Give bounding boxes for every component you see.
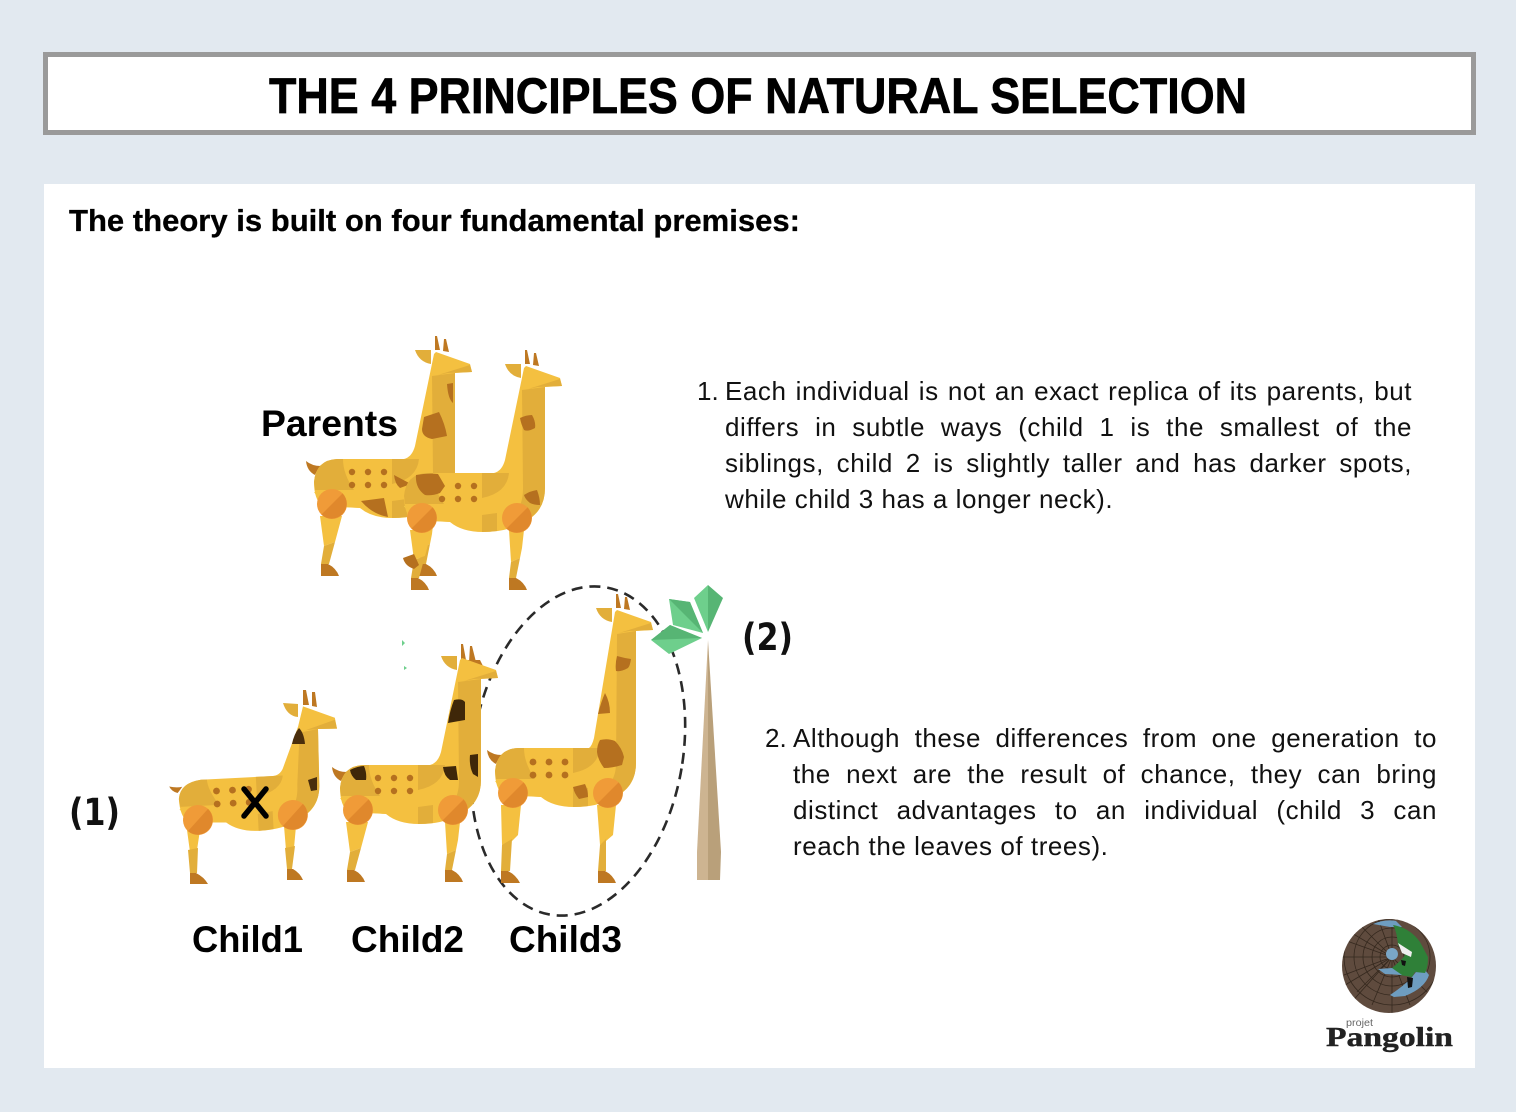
main white panel <box>44 184 1475 1068</box>
illustration: child 3 giraffe with long neck <box>487 594 653 883</box>
title banner <box>43 52 1476 135</box>
logo wordmark: Pangolin <box>1326 1022 1453 1052</box>
paragraph: premise 2: reach the leaves of trees). <box>793 831 1108 861</box>
paragraph: premise 1: siblings, child 2 is slightly taller and has darker spots, <box>725 448 1412 478</box>
label: Child3: Child3 <box>509 919 622 960</box>
marker: 1.: 1. <box>697 376 719 406</box>
logo wordmark: projet <box>1346 1018 1373 1029</box>
dashed ellipse around child 3 <box>447 570 709 932</box>
paragraph: premise 1 <box>725 376 1412 514</box>
illustration: child 2 giraffe <box>332 644 498 882</box>
label: (2) advantage: (2) <box>742 616 793 659</box>
title: THE 4 PRINCIPLES OF NATURAL SELECTION <box>269 68 1247 124</box>
paragraph: premise 1: while child 3 has a longer neck). <box>725 484 1113 514</box>
paragraph: premise 1: Each individual is not an exact replica of its parents, but <box>725 376 1412 406</box>
label: Child1: Child1 <box>192 919 303 960</box>
paragraph: premise 2: distinct advantages to an individual (child 3 can <box>793 795 1437 825</box>
paragraph: premise 2: Although these differences from one generation to <box>793 723 1437 753</box>
illustration: child 1 giraffe <box>165 690 342 884</box>
paragraph: premise 2: the next are the result of chance, they can bring <box>793 759 1437 789</box>
illustration: parent giraffe right <box>403 350 562 590</box>
label: Parents: Parents <box>261 403 398 444</box>
tree with green leaves <box>402 585 723 880</box>
heading: four premises: The theory is built on four fundamental premises: <box>69 203 800 238</box>
marker: 2.: 2. <box>765 723 787 753</box>
label: (1) variation: (1) <box>69 791 120 834</box>
paragraph: premise 2 <box>793 723 1437 861</box>
cross mark on child 1 <box>244 789 266 816</box>
label: Child2: Child2 <box>351 919 464 960</box>
illustration: parent giraffe left <box>306 336 472 576</box>
paragraph: premise 1: differs in subtle ways (child 1 is the smallest of the <box>725 412 1412 442</box>
logo: Projet Pangolin <box>1326 919 1453 1052</box>
